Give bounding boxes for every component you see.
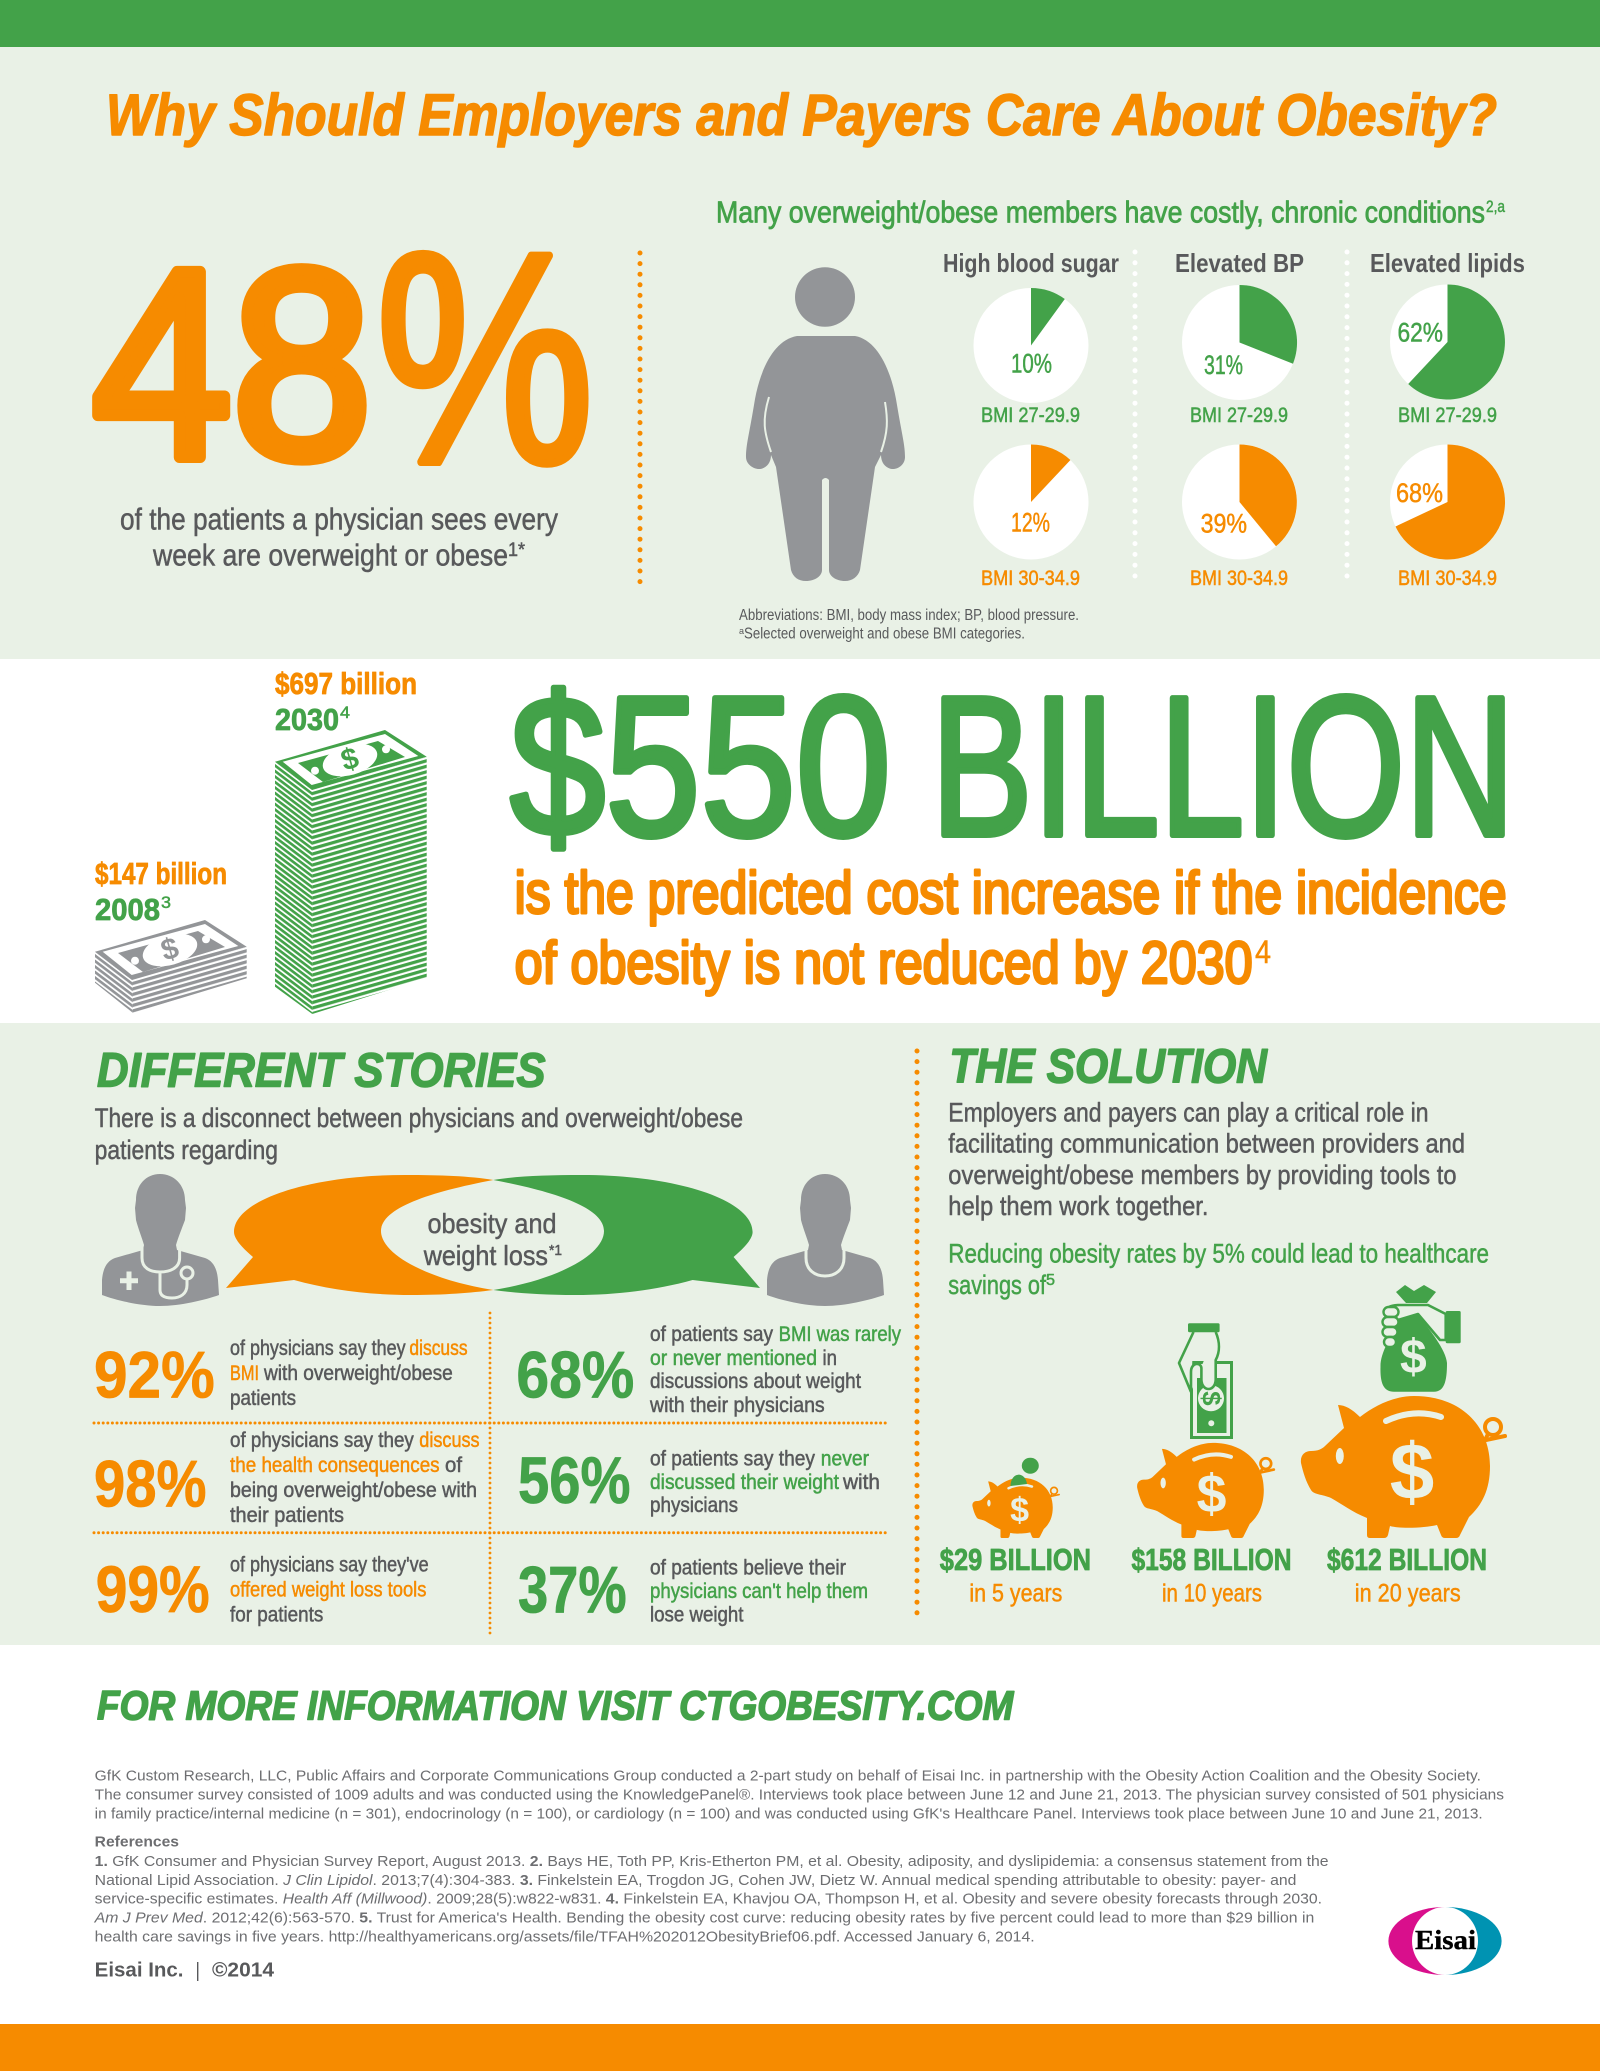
logo: Eisai: Eisai — [1415, 1925, 1477, 1955]
savings label: 612 billion in 20 years: $612 BILLION — [1327, 1542, 1487, 1577]
panel: 48 percent statistic — [92, 190, 594, 572]
stat: 37% of patients: of patients believe their — [650, 1556, 846, 1579]
stat: 37% of patients: lose weight — [650, 1604, 744, 1627]
bubble text: obesity and weight loss: obesity and — [428, 1208, 556, 1239]
stat: 99% of physicians: of physicians say they've — [230, 1554, 429, 1577]
stat: 68% of patients: in — [822, 1347, 837, 1370]
references: National Lipid Association. J Clin Lipidol . 2013;7(4):304-383. 3. Finkelstein EA, Trogdon JG, Cohen JW, Dietz W. Annual medical spending attributable to obesity: payer- and — [95, 1872, 1296, 1889]
top green band — [0, 0, 1600, 47]
stat: 56% of patients: with — [842, 1471, 880, 1494]
bubble text: obesity and weight loss — [423, 1208, 562, 1271]
label: 697 billion 2030 — [275, 666, 417, 737]
copyright line: ©2014 — [212, 1960, 275, 1982]
solution paragraph: overweight/obese members by providing tools to — [948, 1160, 1456, 1190]
stat: 56% of patients: physicians — [650, 1494, 738, 1517]
chronic conditions heading: 2,a — [1486, 197, 1505, 216]
column heading: elevated BP: Elevated BP — [1175, 248, 1304, 278]
stat: 37% of patients: physicians can't help them — [650, 1580, 868, 1603]
pie: elevated BP BMI 30-34.9 39% — [1182, 444, 1297, 590]
column heading: high blood sugar: High blood sugar — [943, 248, 1119, 278]
pie: elevated BP BMI 27-29.9 31%: 31% — [1204, 350, 1243, 380]
icon: physician with stethoscope — [102, 1174, 219, 1306]
heading: different stories: DIFFERENT STORIES — [97, 1045, 546, 1098]
column heading: elevated lipids: Elevated lipids — [1370, 248, 1525, 278]
references — [94, 1834, 1329, 1945]
48% caption — [120, 502, 558, 572]
stat: 92% of physicians: 92% — [94, 1338, 215, 1412]
references: 1. GfK Consumer and Physician Survey Report, August 2013. 2. Bays HE, Toth PP, Kris-Etherton PM, et al. Obesity, adiposity, and dyslipidemia: a consensus statement from the — [95, 1853, 1329, 1870]
cost increase sentence: of obesity is not reduced by 2030 — [515, 930, 1253, 996]
abbreviations note: Abbreviations: BMI, body mass index; BP, blood pressure. — [739, 607, 1079, 624]
stat: 99% of physicians: 99% — [96, 1552, 210, 1626]
savings label: 158 billion in 10 years: in 10 years — [1162, 1580, 1262, 1608]
bubble text: obesity and weight loss: *1 — [549, 1242, 562, 1259]
study methodology note: The consumer survey consisted of 1009 adults and was conducted using the KnowledgePanel®. Interviews took place between June 12 and June 21, 2013. The physician survey consisted of 501 physicians — [95, 1787, 1504, 1804]
savings sentence: 5 — [1046, 1272, 1055, 1289]
stat: 92% of physicians — [94, 1337, 468, 1412]
savings label: 158 billion in 10 years — [1132, 1542, 1292, 1608]
stat: 99% of physicians: for patients — [230, 1604, 323, 1627]
stat: 92% of physicians: BMI — [230, 1362, 259, 1385]
stat: 98% of physicians: of physicians say they — [230, 1429, 414, 1452]
stat: 92% of physicians: discuss — [409, 1337, 468, 1360]
solution paragraph: facilitating communication between providers and — [948, 1129, 1465, 1159]
pie: high blood sugar BMI 27-29.9 10%: BMI 27-29.9 — [981, 404, 1080, 427]
label: 147 billion 2008: 3 — [161, 893, 171, 912]
solution paragraph: Employers and payers can play a critical role in — [948, 1098, 1428, 1128]
icon: overweight person — [746, 267, 905, 581]
speech bubble: patients, green — [493, 1175, 760, 1295]
pie: elevated lipids BMI 30-34.9 68% — [1390, 444, 1505, 590]
panel: cost of obesity — [95, 656, 1515, 1014]
label: 147 billion 2008: $147 billion — [95, 856, 227, 891]
solution paragraph: help them work together. — [948, 1191, 1208, 1221]
heading: the solution: THE SOLUTION — [949, 1041, 1268, 1094]
savings sentence — [948, 1238, 1489, 1300]
solution paragraph — [948, 1098, 1465, 1221]
icon: small piggy bank with coins — [972, 1458, 1059, 1538]
icon: medium piggy bank with bill and hand — [1137, 1323, 1274, 1538]
stat: 37% of patients: 37% — [518, 1553, 627, 1627]
stat: 56% of patients: of patients say they — [650, 1448, 815, 1471]
panel: the solution — [940, 1041, 1505, 1608]
stat: 98% of physicians: being overweight/obese with — [230, 1479, 477, 1502]
panel: top background — [0, 47, 1600, 659]
copyright line — [95, 1960, 275, 1982]
references: service-specific estimates. Health Aff (Millwood) . 2009;28(5):w822-w831. 4. Finkelstein EA, Khavjou OA, Thompson H, et al. Obesity and severe obesity forecasts through 2030. — [95, 1891, 1322, 1908]
stat: 37% of patients — [518, 1553, 868, 1627]
label: 147 billion 2008 — [95, 856, 227, 927]
speech bubble: physicians, orange — [226, 1175, 493, 1295]
panel: different stories and solution background — [0, 1023, 1600, 1645]
abbreviations note: Selected overweight and obese BMI categories. — [744, 626, 1025, 643]
pie: elevated BP BMI 30-34.9 39%: BMI 30-34.9 — [1190, 567, 1288, 590]
stat: 92% of physicians: patients — [230, 1387, 296, 1410]
big number 550 billion: $550 — [510, 656, 891, 878]
icon: large piggy bank with money bag and hand: $ — [1390, 1427, 1434, 1516]
label: 697 billion 2030: $697 billion — [275, 666, 417, 701]
stat: 98% of physicians — [94, 1429, 480, 1527]
savings sentence: savings of — [948, 1270, 1046, 1300]
bubble text: obesity and weight loss: weight loss — [423, 1240, 548, 1271]
references: Am J Prev Med . 2012;42(6):563-570. 5. Trust for America's Health. Bending the obesity cost curve: reducing obesity rates by five percent could lead to more than $29 billion in — [94, 1910, 1314, 1927]
pie: elevated BP BMI 27-29.9 31% — [1182, 285, 1297, 427]
pie: high blood sugar BMI 27-29.9 10% — [974, 288, 1088, 427]
abbreviations note — [739, 607, 1079, 643]
stat: 68% of patients: 68% — [516, 1338, 634, 1412]
icon: small grey money stack — [95, 920, 247, 1013]
pie: elevated lipids BMI 30-34.9 68%: 68% — [1396, 478, 1443, 508]
abbreviations note: a — [739, 626, 744, 636]
intro text — [95, 1103, 743, 1165]
icon: small grey money stack: $ — [157, 931, 183, 968]
pie: elevated BP BMI 27-29.9 31%: BMI 27-29.9 — [1190, 404, 1288, 427]
icon: medium piggy bank with bill and hand: $ — [1197, 1464, 1227, 1524]
stat: 98% of physicians: their patients — [230, 1504, 344, 1527]
icon: medium piggy bank with bill and hand: $ — [1196, 1391, 1226, 1406]
call to action: more information: FOR MORE INFORMATION VISIT CTGOBESITY.COM — [97, 1682, 1014, 1728]
panel: different stories — [94, 1045, 901, 1638]
stat: 92% of physicians: with overweight/obese — [263, 1362, 453, 1385]
stat: 98% of physicians: the health consequences — [230, 1454, 440, 1477]
savings sentence: Reducing obesity rates by 5% could lead to healthcare — [948, 1238, 1489, 1268]
references: References — [95, 1834, 179, 1851]
stat: 68% of patients: with their physicians — [649, 1394, 825, 1417]
pie: high blood sugar BMI 30-34.9 12% — [974, 444, 1088, 590]
pie: high blood sugar BMI 27-29.9 10%: 10% — [1011, 349, 1052, 379]
pie: elevated BP BMI 30-34.9 39%: 39% — [1201, 509, 1247, 539]
pie: elevated lipids BMI 27-29.9 62%: BMI 27-29.9 — [1398, 404, 1497, 427]
48% caption: 1* — [508, 540, 526, 561]
pie: elevated lipids BMI 27-29.9 62%: 62% — [1398, 318, 1443, 348]
cost increase sentence — [515, 860, 1507, 996]
icon: small piggy bank with coins: $ — [1010, 1491, 1029, 1529]
icon: patient — [767, 1174, 884, 1306]
stat: 56% of patients — [518, 1443, 880, 1517]
savings label: 158 billion in 10 years: $158 BILLION — [1132, 1542, 1292, 1577]
pie: high blood sugar BMI 30-34.9 12%: BMI 30-34.9 — [981, 567, 1080, 590]
stat: 98% of physicians: of — [445, 1454, 462, 1477]
big number 48% — [92, 190, 594, 526]
intro text: There is a disconnect between physicians and overweight/obese — [95, 1103, 743, 1133]
copyright line: Eisai Inc. — [95, 1960, 184, 1982]
stat: 68% of patients: of patients say — [650, 1323, 773, 1346]
pie: elevated lipids BMI 30-34.9 68%: BMI 30-34.9 — [1398, 567, 1497, 590]
logo: Eisai — [1388, 1907, 1502, 1975]
icon: tall green money stack: $ — [337, 741, 363, 778]
savings label: 612 billion in 20 years: in 20 years — [1355, 1580, 1461, 1608]
icon: large piggy bank with money bag and hand — [1301, 1285, 1505, 1538]
savings label: 612 billion in 20 years — [1327, 1542, 1487, 1608]
savings label: 29 billion in 5 years: in 5 years — [969, 1580, 1062, 1608]
chronic conditions heading: Many overweight/obese members have costly, chronic conditions — [716, 194, 1485, 230]
label: 147 billion 2008: 2008 — [95, 892, 160, 927]
48% caption: of the patients a physician sees every — [120, 502, 558, 536]
icon: tall green money stack — [275, 730, 427, 1014]
savings label: 29 billion in 5 years — [940, 1542, 1091, 1608]
study methodology note: GfK Custom Research, LLC, Public Affairs and Corporate Communications Group conducted a 2-part study on behalf of Eisai Inc. in partnership with the Obesity Action Coalition and the Obesity Society. — [95, 1768, 1481, 1785]
stat: 68% of patients — [516, 1323, 901, 1417]
study methodology note — [95, 1768, 1504, 1822]
cost increase sentence: 4 — [1255, 934, 1271, 970]
intro text: patients regarding — [95, 1135, 278, 1165]
stat: 98% of physicians: 98% — [94, 1447, 206, 1521]
savings label: 29 billion in 5 years: $29 BILLION — [940, 1542, 1091, 1577]
label: 697 billion 2030: 4 — [340, 703, 350, 722]
stat: 99% of physicians — [96, 1552, 429, 1627]
stat: 56% of patients: never — [821, 1448, 869, 1471]
48% caption: week are overweight or obese — [152, 538, 508, 572]
references: health care savings in five years. http://healthyamericans.org/assets/file/TFAH%202012ObesityBrief06.pdf. Accessed January 6, 2014. — [95, 1928, 1035, 1945]
bottom orange band — [0, 2024, 1600, 2071]
label: 697 billion 2030: 2030 — [275, 702, 339, 737]
big number 550 billion — [510, 656, 1515, 878]
pie: high blood sugar BMI 30-34.9 12%: 12% — [1011, 508, 1050, 538]
pie: elevated lipids BMI 27-29.9 62% — [1390, 284, 1505, 427]
big number 48%: % — [376, 190, 594, 526]
stat: 56% of patients: discussed their weight — [650, 1471, 839, 1494]
stat: 92% of physicians: of physicians say they — [230, 1337, 406, 1360]
stat: 56% of patients: 56% — [518, 1443, 630, 1517]
stat: 68% of patients: or never mentioned — [650, 1347, 817, 1370]
stat: 68% of patients: discussions about weight — [650, 1370, 861, 1393]
icon: large piggy bank with money bag and hand: $ — [1400, 1331, 1427, 1384]
study methodology note: in family practice/internal medicine (n = 301), endocrinology (n = 100), or cardiology (n = 100) and was conducted using GfK's Healthcare Panel. Interviews took place between June 10 and June 21, 2013. — [95, 1805, 1483, 1822]
panel: chronic conditions — [716, 194, 1525, 643]
stat: 68% of patients: BMI was rarely — [779, 1323, 901, 1346]
big number 48%: 48 — [92, 214, 372, 515]
stat: 98% of physicians: discuss — [419, 1429, 480, 1452]
stat: 99% of physicians: offered weight loss tools — [230, 1579, 426, 1602]
